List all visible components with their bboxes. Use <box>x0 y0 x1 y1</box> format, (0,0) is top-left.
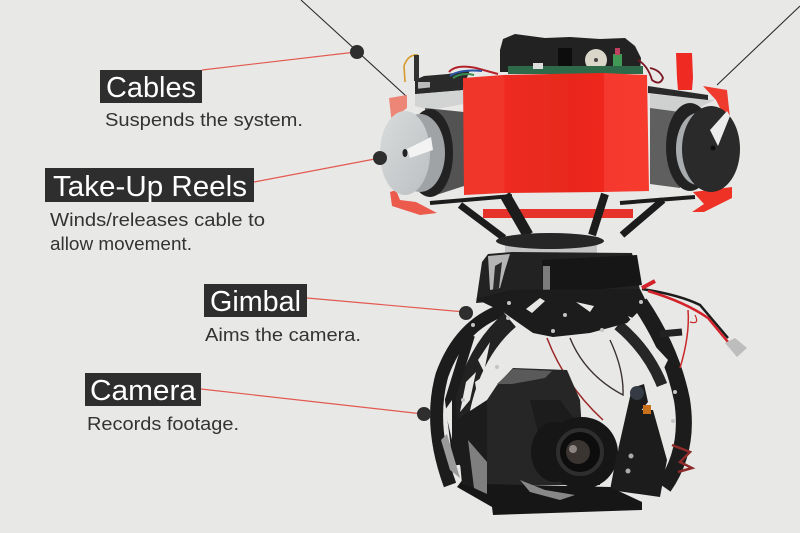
marker dot <box>373 151 387 165</box>
callout: Cables <box>100 45 364 130</box>
marker dot <box>350 45 364 59</box>
photo: cable camera rig <box>301 0 800 515</box>
callout: Camera <box>85 373 431 434</box>
label <box>204 284 307 317</box>
mount struts <box>430 194 695 238</box>
description: Suspends the system. <box>105 109 303 130</box>
description: Aims the camera. <box>205 324 361 345</box>
take-up reel: left <box>380 109 453 197</box>
gimbal top plate <box>496 233 604 257</box>
leader line <box>307 298 465 312</box>
leader line <box>201 389 423 414</box>
callout: Gimbal: Gimbal <box>210 286 301 318</box>
upper electronics <box>404 34 693 94</box>
label <box>45 168 254 202</box>
description: Records footage. <box>87 413 239 434</box>
red side frames <box>389 86 732 218</box>
wires and battery connector <box>547 281 747 420</box>
leader line <box>202 52 356 70</box>
gimbal motor arm <box>610 384 692 497</box>
marker dot <box>417 407 431 421</box>
camera <box>487 368 618 489</box>
take-up reel: right <box>666 103 740 192</box>
callout: Take-Up Reels: allow movement. <box>50 233 192 254</box>
marker dot <box>459 306 473 320</box>
red centre housing <box>463 73 649 195</box>
leader line <box>254 158 380 182</box>
lattice cut-outs <box>445 298 668 440</box>
metal housings <box>415 84 715 197</box>
callout: Camera: Camera <box>90 375 197 407</box>
description: Winds/releases cable to <box>50 209 265 230</box>
label <box>85 373 201 406</box>
bottom plate <box>441 400 642 515</box>
gimbal <box>437 252 684 487</box>
callout: Gimbal <box>204 284 473 345</box>
callout: Take-Up Reels <box>45 151 387 254</box>
callout: Cables: Cables <box>106 72 196 104</box>
callout: Take-Up Reels: Take-Up Reels <box>53 171 247 203</box>
rings <box>437 303 684 487</box>
cables <box>301 0 800 96</box>
bracket and box <box>476 252 640 303</box>
label <box>100 70 202 103</box>
